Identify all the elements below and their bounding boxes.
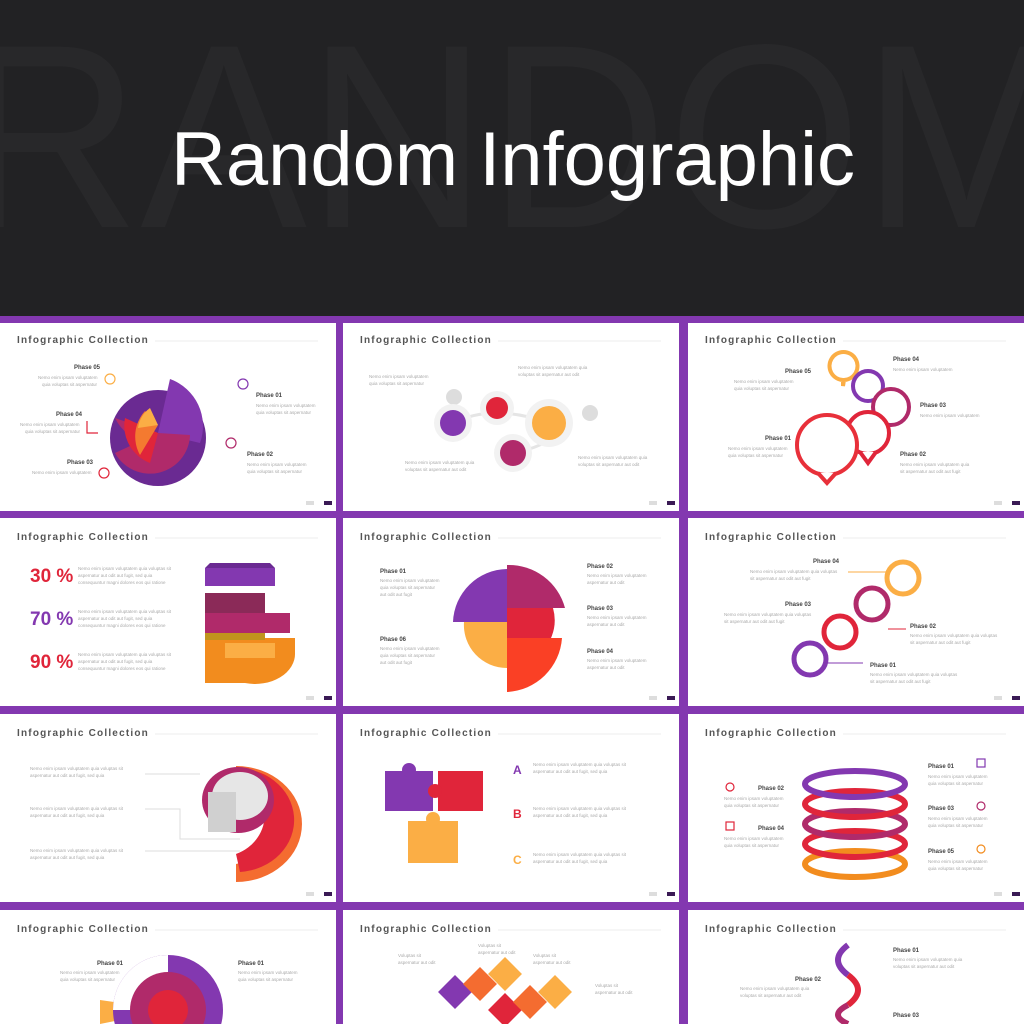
slide 11: diamonds: Voluptas sit xyxy=(533,953,557,958)
circle segments xyxy=(453,565,565,692)
slide 11: diamonds: Voluptas sit xyxy=(595,983,619,988)
slide 6: diagonal circles: Phase 03 xyxy=(785,602,812,608)
slide 8: puzzle: Nemo enim ipsam voluptatem quia voluptas sit xyxy=(533,852,627,857)
slide 9: ring stack: quia voluptas sit aspernatur xyxy=(928,866,984,871)
slide 5: segmented circle: quia voluptas sit aspernatur xyxy=(380,653,436,658)
puzzle pieces xyxy=(385,763,483,863)
rings xyxy=(805,771,905,877)
slide 9: ring stack: Phase 02 xyxy=(758,786,785,792)
slide 7: 3D ring: Nemo enim ipsam voluptatem quia voluptas sit xyxy=(30,806,124,811)
slide 10: partial circles: Phase 01 xyxy=(238,961,265,967)
slide 3: location pins xyxy=(688,323,1024,511)
slide 6: diagonal circles: Nemo enim ipsam voluptatem quia voluptas xyxy=(750,569,838,574)
slide 1: 3D pie: Nemo enim ipsam voluptatem xyxy=(32,470,92,475)
slide 3: location pins: Nemo enim ipsam voluptatem quia xyxy=(900,462,970,467)
slide 7: 3D ring: Nemo enim ipsam voluptatem quia voluptas sit xyxy=(30,848,124,853)
slide 2: circle network: quia voluptas sit aspernatur xyxy=(369,381,425,386)
slide 8: puzzle: A xyxy=(513,763,522,777)
slide 12: S-curve: voluptas sit aspernatur aut odit xyxy=(740,993,802,998)
slide 5: segmented circle: aspernatur aut odit xyxy=(587,665,625,670)
ring layers xyxy=(202,766,302,882)
slide 6: diagonal circles: Nemo enim ipsam voluptatem quia voluptas xyxy=(910,633,998,638)
slide 5: segmented circle: aspernatur aut odit xyxy=(587,622,625,627)
slide 2: circle network: voluptas sit aspernatur aut odit xyxy=(405,467,467,472)
slide 5: segmented circle: Nemo enim ipsam voluptatem xyxy=(587,615,647,620)
slide 5: segmented circle: Phase 01 xyxy=(380,569,407,575)
slide 10: partial circles xyxy=(0,910,336,1024)
slide 9: ring stack: quia voluptas sit aspernatur xyxy=(724,803,780,808)
slide 6: diagonal circles: Phase 02 xyxy=(910,624,937,630)
slide 3: location pins: Infographic Collection xyxy=(705,335,837,346)
slide 5: segmented circle xyxy=(343,518,679,706)
slide 12: S-curve: Phase 03 xyxy=(893,1013,920,1019)
slide 4: percentages xyxy=(0,518,336,706)
slide 6: diagonal circles: Phase 04 xyxy=(813,559,840,565)
slide 8: puzzle xyxy=(343,714,679,902)
slide 11: diamonds: Voluptas sit xyxy=(398,953,422,958)
slide 10: partial circles: quia voluptas sit aspernatur xyxy=(238,977,294,982)
slide 12: S-curve: Nemo enim ipsam voluptatem quia xyxy=(740,986,810,991)
slide 3: location pins: Phase 05 xyxy=(785,369,812,375)
slide 1: 3D pie: quia voluptas sit aspernatur xyxy=(42,382,98,387)
pie chart xyxy=(110,379,206,486)
slide 5: segmented circle: Phase 03 xyxy=(587,606,614,612)
slide 4: percentages: consequuntur magni dolores eos qui ratione xyxy=(78,666,166,671)
slide 4: percentages: consequuntur magni dolores eos qui ratione xyxy=(78,580,166,585)
slide 7: 3D ring: aspernatur aut odit aut fugit, sed quia xyxy=(30,773,105,778)
slide 9: ring stack: Phase 03 xyxy=(928,806,955,812)
slide 1: 3D pie: quia voluptas sit aspernatur xyxy=(25,429,81,434)
slide 5: segmented circle: Nemo enim ipsam voluptatem xyxy=(587,658,647,663)
slide 10: partial circles: Infographic Collection xyxy=(17,924,149,935)
header xyxy=(0,0,1024,316)
title: Random Infographic xyxy=(171,117,855,202)
slide 5: segmented circle: quia voluptas sit aspernatur xyxy=(380,585,436,590)
slide 7: 3D ring: Nemo enim ipsam voluptatem quia voluptas sit xyxy=(30,766,124,771)
slide 1: 3D pie xyxy=(0,323,336,511)
slide 9: ring stack: Nemo enim ipsam voluptatem xyxy=(724,836,784,841)
slide 12: S-curve: Phase 01 xyxy=(893,948,920,954)
slide 1: 3D pie: Nemo enim ipsam voluptatem xyxy=(38,375,98,380)
slide 9: ring stack: Phase 05 xyxy=(928,849,955,855)
slide 9: ring stack: quia voluptas sit aspernatur xyxy=(928,781,984,786)
slide 2: circle network: voluptas sit aspernatur aut odit xyxy=(518,372,580,377)
slide 6: diagonal circles: Nemo enim ipsam voluptatem quia voluptas xyxy=(724,612,812,617)
slide 8: puzzle: aspernatur aut odit aut fugit, sed quia xyxy=(533,769,608,774)
slide 5: segmented circle: Infographic Collection xyxy=(360,532,492,543)
phase labels: Phase 02 xyxy=(247,452,274,458)
slide 12: S-curve: voluptas sit aspernatur aut odit xyxy=(893,964,955,969)
slide 9: ring stack: Infographic Collection xyxy=(705,728,837,739)
slide 7: 3D ring xyxy=(0,714,336,902)
slide 12: S-curve: Infographic Collection xyxy=(705,924,837,935)
slide 5: segmented circle: Phase 04 xyxy=(587,649,614,655)
slide 8: puzzle: C xyxy=(513,853,522,867)
percent values: 30 % xyxy=(30,566,73,587)
slide 8: puzzle: Nemo enim ipsam voluptatem quia voluptas sit xyxy=(533,806,627,811)
slide 10: partial circles: Nemo enim ipsam voluptatem xyxy=(60,970,120,975)
slide 12: S-curve: Nemo enim ipsam voluptatem quia xyxy=(893,957,963,962)
slide 11: diamonds: aspernatur aut odit xyxy=(595,990,633,995)
slide 12: S-curve xyxy=(688,910,1024,1024)
circles xyxy=(794,562,919,675)
slide 10: partial circles: Nemo enim ipsam voluptatem xyxy=(238,970,298,975)
phase labels: Phase 01 xyxy=(256,393,283,399)
slide 10: partial circles: quia voluptas sit aspernatur xyxy=(60,977,116,982)
3D stacked rings xyxy=(205,563,295,684)
slide 4: percentages: Nemo enim ipsam voluptatem quia voluptas sit xyxy=(78,609,172,614)
slide 11: diamonds: aspernatur aut odit xyxy=(398,960,436,965)
slide 3: location pins: Phase 01 xyxy=(765,436,792,442)
slide 12: S-curve: Phase 02 xyxy=(795,977,822,983)
slide 4: percentages: aspernatur aut odit aut fugit, sed quia xyxy=(78,573,153,578)
concentric chart xyxy=(100,955,223,1024)
slide 9: ring stack: Nemo enim ipsam voluptatem xyxy=(928,774,988,779)
slide 8: puzzle: B xyxy=(513,807,522,821)
slide 3: location pins: quia voluptas sit aspernatur xyxy=(728,453,784,458)
percent values: 90 % xyxy=(30,652,73,673)
slide 3: location pins: Phase 04 xyxy=(893,357,920,363)
slide 8: puzzle: Nemo enim ipsam voluptatem quia voluptas sit xyxy=(533,762,627,767)
curve xyxy=(838,945,858,1024)
slide 1: 3D pie: Nemo enim ipsam voluptatem xyxy=(256,403,316,408)
slide 6: diagonal circles: Phase 01 xyxy=(870,663,897,669)
slide 4: percentages: aspernatur aut odit aut fugit, sed quia xyxy=(78,616,153,621)
phase labels: Phase 03 xyxy=(67,460,94,466)
slide 2: circle network xyxy=(343,323,679,511)
slide 3: location pins: Nemo enim ipsam voluptatem xyxy=(893,367,953,372)
slide 4: percentages: aspernatur aut odit aut fugit, sed quia xyxy=(78,659,153,664)
slide 2: circle network: Infographic Collection xyxy=(360,335,492,346)
slide 1: 3D pie: Infographic Collection xyxy=(17,335,149,346)
slide 1: 3D pie: Nemo enim ipsam voluptatem xyxy=(20,422,80,427)
slide 5: segmented circle: aut odit aut fugit xyxy=(380,660,413,665)
slide 5: segmented circle: Nemo enim ipsam voluptatem xyxy=(587,573,647,578)
slide 9: ring stack xyxy=(688,714,1024,902)
slide 2: circle network: Nemo enim ipsam voluptatem quia xyxy=(518,365,588,370)
slide 5: segmented circle: Nemo enim ipsam voluptatem xyxy=(380,578,440,583)
slide 2: circle network: Nemo enim ipsam voluptatem quia xyxy=(405,460,475,465)
slide 9: ring stack: Nemo enim ipsam voluptatem xyxy=(928,816,988,821)
slide 3: location pins: quia voluptas sit aspernatur xyxy=(734,386,790,391)
slide 9: ring stack: quia voluptas sit aspernatur xyxy=(928,823,984,828)
slide 6: diagonal circles: Infographic Collection xyxy=(705,532,837,543)
slide 3: location pins: Nemo enim ipsam voluptatem xyxy=(728,446,788,451)
network diagram xyxy=(434,389,598,472)
slide 8: puzzle: aspernatur aut odit aut fugit, sed quia xyxy=(533,859,608,864)
slide 9: ring stack: Nemo enim ipsam voluptatem xyxy=(724,796,784,801)
slide 3: location pins: Nemo enim ipsam voluptatem xyxy=(734,379,794,384)
slide 4: percentages: Nemo enim ipsam voluptatem quia voluptas sit xyxy=(78,566,172,571)
slide 7: 3D ring: Infographic Collection xyxy=(17,728,149,739)
slide 11: diamonds xyxy=(343,910,679,1024)
slide 6: diagonal circles: sit aspernatur aut odit aut fugit xyxy=(724,619,785,624)
slide 7: 3D ring: aspernatur aut odit aut fugit, sed quia xyxy=(30,855,105,860)
slide 3: location pins: Phase 02 xyxy=(900,452,927,458)
slide 2: circle network: Nemo enim ipsam voluptatem quia xyxy=(578,455,648,460)
slide 9: ring stack: Nemo enim ipsam voluptatem xyxy=(928,859,988,864)
slide 6: diagonal circles: sit aspernatur aut odit aut fugit xyxy=(870,679,931,684)
slide 1: 3D pie: quia voluptas sit aspernatur xyxy=(256,410,312,415)
slide 5: segmented circle: Phase 02 xyxy=(587,564,614,570)
slide 6: diagonal circles: sit aspernatur aut odit aut fugit xyxy=(750,576,811,581)
slide 1: 3D pie: quia voluptas sit aspernatur xyxy=(247,469,303,474)
slide 3: location pins: sit aspernatur aut odit aut fugit xyxy=(900,469,961,474)
slide 2: circle network: Nemo enim ipsam voluptatem xyxy=(369,374,429,379)
percent values xyxy=(30,566,73,673)
slide 1: 3D pie: Nemo enim ipsam voluptatem xyxy=(247,462,307,467)
slide 5: segmented circle: Nemo enim ipsam voluptatem xyxy=(380,646,440,651)
slide 4: percentages: Infographic Collection xyxy=(17,532,149,543)
slide 9: ring stack: Phase 01 xyxy=(928,764,955,770)
slide 4: percentages: consequuntur magni dolores eos qui ratione xyxy=(78,623,166,628)
slide 8: puzzle: aspernatur aut odit aut fugit, sed quia xyxy=(533,813,608,818)
slide 11: diamonds: aspernatur aut odit xyxy=(478,950,516,955)
slide 7: 3D ring: aspernatur aut odit aut fugit, sed quia xyxy=(30,813,105,818)
slide 8: puzzle: Infographic Collection xyxy=(360,728,492,739)
slide 10: partial circles: Phase 01 xyxy=(97,961,124,967)
pins xyxy=(797,352,909,483)
percent values: 70 % xyxy=(30,609,73,630)
slide 5: segmented circle: aspernatur aut odit xyxy=(587,580,625,585)
slide 4: percentages: Nemo enim ipsam voluptatem quia voluptas sit xyxy=(78,652,172,657)
slide 5: segmented circle: aut odit aut fugit xyxy=(380,592,413,597)
slide 11: diamonds: Infographic Collection xyxy=(360,924,492,935)
slide 9: ring stack: quia voluptas sit aspernatur xyxy=(724,843,780,848)
slide 6: diagonal circles: Nemo enim ipsam voluptatem quia voluptas xyxy=(870,672,958,677)
diamond tiles xyxy=(438,957,572,1024)
phase labels: Phase 04 xyxy=(56,412,83,418)
phase labels: Phase 05 xyxy=(74,365,101,371)
slide 3: location pins: Phase 03 xyxy=(920,403,947,409)
phase labels xyxy=(56,365,283,466)
slide 2: circle network: voluptas sit aspernatur aut odit xyxy=(578,462,640,467)
slide 6: diagonal circles xyxy=(688,518,1024,706)
slide 3: location pins: Nemo enim ipsam voluptatem xyxy=(920,413,980,418)
slide 11: diamonds: Voluptas sit xyxy=(478,943,502,948)
slide 9: ring stack: Phase 04 xyxy=(758,826,785,832)
slide 6: diagonal circles: sit aspernatur aut odit aut fugit xyxy=(910,640,971,645)
slide 11: diamonds: aspernatur aut odit xyxy=(533,960,571,965)
slide 5: segmented circle: Phase 06 xyxy=(380,637,407,643)
